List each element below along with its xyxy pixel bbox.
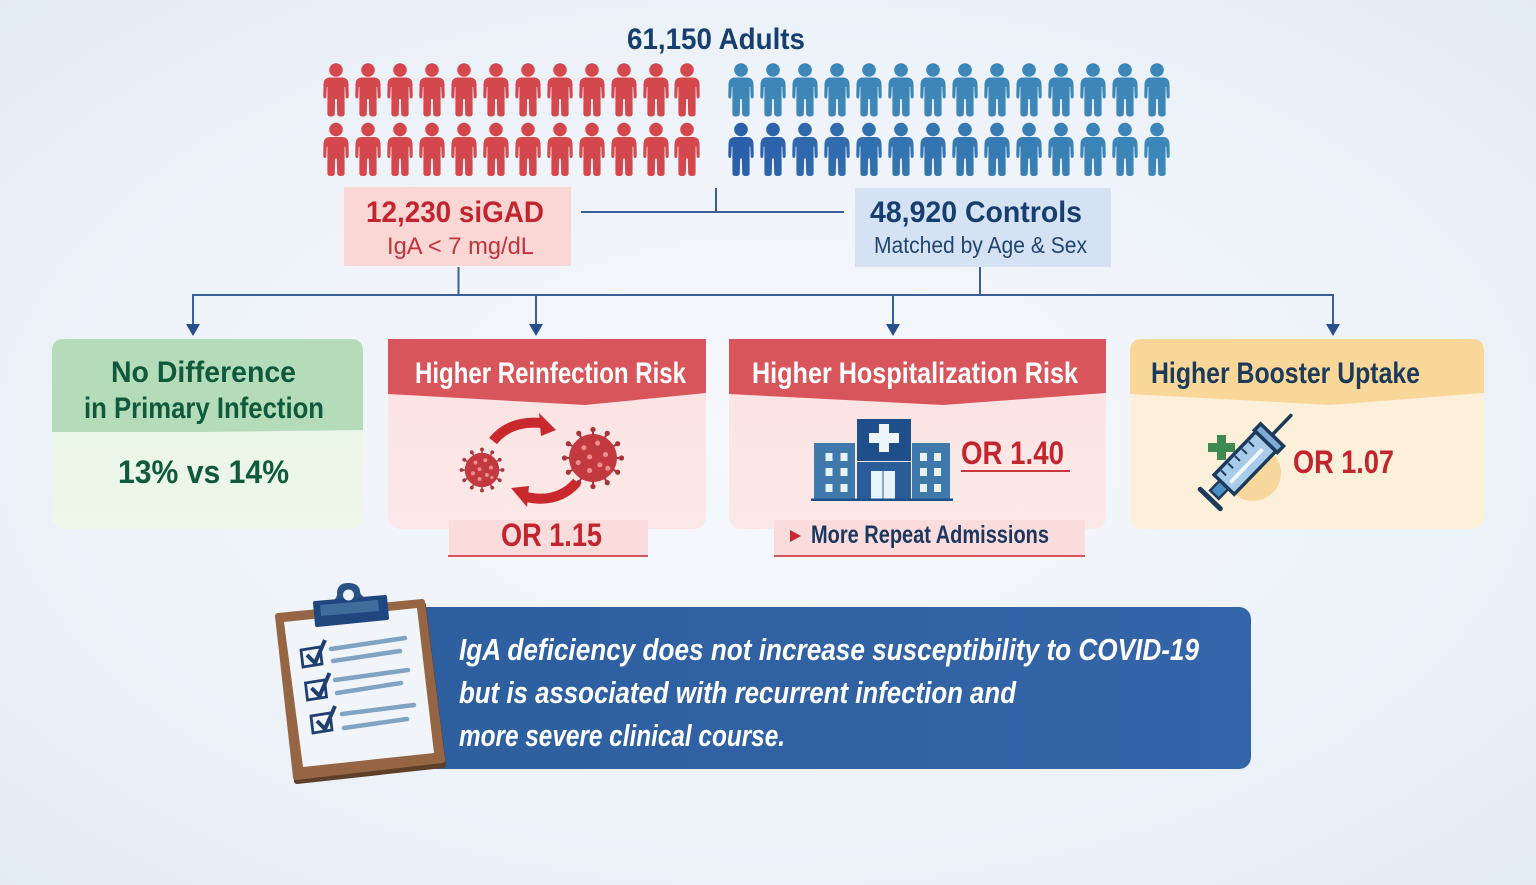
pictogram: siGAD group people xyxy=(323,63,700,176)
panel: no difference in primary infection xyxy=(52,339,363,529)
panel: higher hospitalization risk xyxy=(729,339,1106,557)
heading: no difference: in Primary Infection xyxy=(84,392,324,425)
label: control group xyxy=(855,188,1111,267)
icon: clipboard checklist xyxy=(278,583,443,781)
heading: hospitalization: Higher Hospitalization Risk xyxy=(752,357,1078,390)
value: OR 1.07: OR 1.07 xyxy=(1293,444,1394,480)
connector: tree to outcome panels xyxy=(186,267,1340,336)
panel: higher reinfection risk xyxy=(388,339,706,557)
callout: more repeat admissions: More Repeat Admissions xyxy=(811,521,1049,549)
title: 61,150 Adults xyxy=(627,23,805,56)
label: siGAD group: 12,230 siGAD xyxy=(366,196,544,229)
label: control group: 48,920 Controls xyxy=(870,196,1082,229)
pictogram: control group people xyxy=(728,63,1170,176)
callout: conclusion: IgA deficiency does not increase susceptibility to COVID-19 xyxy=(459,632,1200,667)
icon: hospital xyxy=(811,419,953,501)
icon: large virus xyxy=(562,427,624,489)
value: infection rates: 13% vs 14% xyxy=(118,454,289,490)
icon: recurrence arrows xyxy=(493,413,577,507)
panel: higher booster uptake xyxy=(1130,339,1484,529)
connector: group bracket xyxy=(581,188,844,212)
callout: conclusion xyxy=(400,607,1251,769)
callout: more repeat admissions xyxy=(774,520,1085,557)
callout: OR 1.15: OR 1.15 xyxy=(501,517,602,553)
heading: no difference: No Difference xyxy=(111,356,296,389)
label: control group: Matched by Age & Sex xyxy=(874,232,1087,258)
heading: booster: Higher Booster Uptake xyxy=(1151,357,1420,390)
icon: small virus xyxy=(460,448,504,492)
callout: OR 1.15 xyxy=(448,517,648,557)
heading: no difference xyxy=(84,356,324,425)
icon: syringe with plus xyxy=(1199,404,1302,510)
callout: conclusion: but is associated with recurrent infection and xyxy=(459,675,1017,710)
callout: conclusion: more severe clinical course. xyxy=(459,718,785,753)
value: OR 1.40: OR 1.40 xyxy=(961,435,1064,471)
label: siGAD group: IgA < 7 mg/dL xyxy=(387,233,534,260)
heading: reinfection: Higher Reinfection Risk xyxy=(415,357,686,390)
label: siGAD group xyxy=(344,187,571,266)
